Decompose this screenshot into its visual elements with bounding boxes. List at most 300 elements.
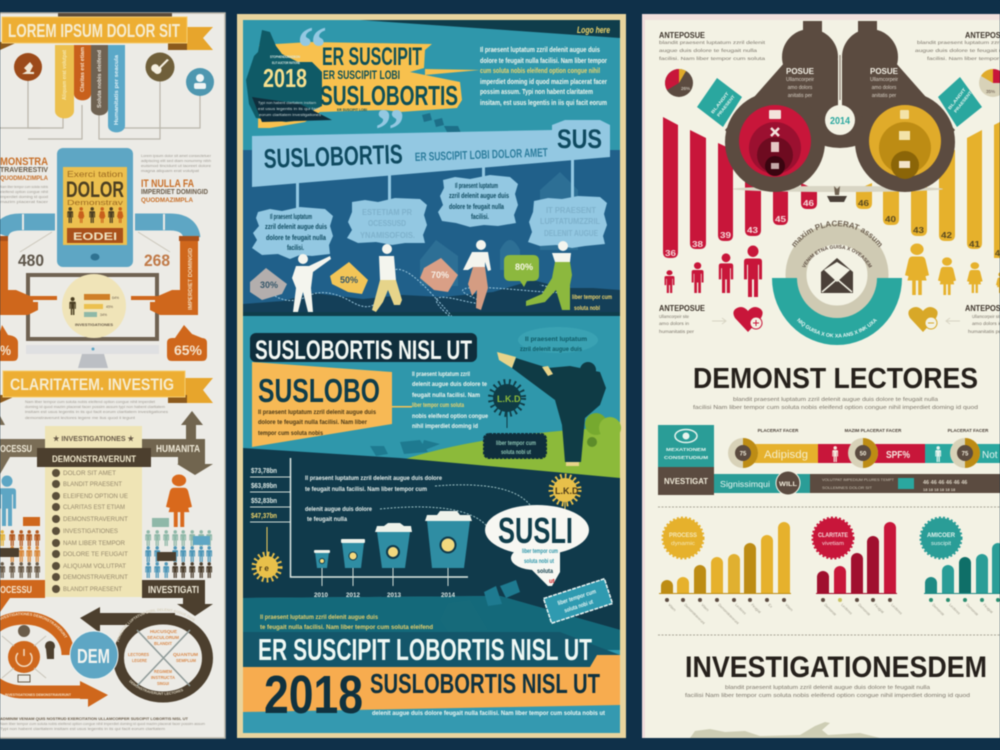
info box: CONSETUDIUM	[664, 455, 708, 460]
list panel: ELEIFEND OPTION UE	[63, 494, 128, 500]
footer heading band	[243, 632, 620, 733]
bar chart: teal: Lectores	[948, 603, 961, 616]
left person and people grid	[0, 476, 40, 578]
bubble 2: YNAMISOFOIS.	[360, 231, 415, 240]
footer text: Typi non habent claritatem insitam est usus legentis in iis qui facit eorum claritatem	[0, 727, 165, 731]
arrows	[422, 113, 464, 140]
teal note	[544, 579, 612, 623]
bar chart: teal	[924, 543, 1000, 617]
figure 4	[526, 241, 572, 310]
icon: envelope	[821, 258, 853, 293]
list panel: INVESTIGATIONES	[63, 529, 118, 535]
binoculars: 2014	[830, 116, 850, 127]
bubble 1	[252, 207, 333, 259]
bar chart: red	[816, 522, 903, 617]
year labels: 2013	[387, 592, 401, 599]
white column text: feugait nulla facilisi. Nam	[412, 392, 480, 399]
column labels: PLACERAT FACER	[948, 428, 989, 433]
bubble 4: IT PRAESENT	[546, 206, 596, 215]
badge: amicoer: suscipit	[931, 541, 952, 547]
tablet: Demonstrav	[67, 198, 123, 207]
top right text: facilisi. Nam liber tempor cum soluta	[927, 56, 1000, 61]
dark cycle diagram: REGIMEM	[154, 669, 172, 674]
badge: process: dynamic	[671, 541, 695, 547]
bar chart: teal: Demonstr	[965, 603, 980, 617]
text: monstra: Nam liber tempor cum soluta nobis	[0, 185, 48, 189]
badge: claritate: CLARITATE	[818, 533, 848, 539]
heading: investigationesdem: blandit praesent luptatum zzril delenit augue duis dolore te feugait nulla	[725, 685, 930, 691]
bar chart: red: Feugiat	[873, 603, 885, 614]
text: monstra: MONSTRA	[0, 156, 48, 168]
list panel: ALIQUAM VOLUTPAT	[63, 564, 126, 570]
list panel: BLANDIT PRAESENT	[63, 587, 122, 593]
red bars: 43	[747, 226, 759, 235]
orange cycle diagram: INVESTIGATIONES DEMONSTRAVERUNT	[5, 693, 72, 697]
text: it nulla fa: IMPERDIET DOMINGID	[141, 189, 208, 196]
cup 2013	[375, 523, 412, 586]
top left text: ANTEPOSUE	[659, 31, 706, 40]
top right text: blandit praesent luptatum zzril delenit	[917, 40, 1000, 45]
yellow bars: 42	[941, 231, 953, 240]
vertical tabs: Claritas est etiam	[80, 46, 86, 92]
paragraph: demonstraverunt lectores legere me lius quod ii legunt	[25, 416, 135, 420]
white column text: Il praesent luptatum zzril	[412, 371, 470, 378]
yellow people	[905, 244, 1000, 295]
white column text: delenit augue duis dolore te	[412, 381, 487, 388]
kicker section: lighter sky, hill and silhouette: Il praesent luptatum	[525, 336, 587, 343]
quote title block: Typi non habent claritatem insitam	[258, 101, 316, 105]
footer text: Nam liber tempor cum soluta nobis eleifend option congue nihil imperdiet doming id quod mazim placerat facer possim assum	[0, 722, 205, 726]
bubble 4: DELENIT AUGUE	[544, 229, 599, 238]
orange columns and pointing hands: IMPERDIET DOMINGID	[188, 248, 194, 310]
bottom right note: humanitatis per	[968, 329, 1000, 334]
central ring diagram: maxim PLACERAT assum	[792, 220, 882, 248]
footer heading band: SUSLOBORTIS NISL UT	[370, 668, 600, 699]
map silhouette	[690, 722, 880, 738]
white column text: nobis eleifend option congue	[412, 413, 488, 420]
pipes	[0, 214, 199, 241]
speech bubble: 65%	[167, 325, 207, 361]
skyline background	[243, 150, 620, 316]
dark cycle diagram: HUCUSQUE	[150, 629, 177, 634]
text: it nulla fa: IT NULLA FA	[141, 178, 194, 190]
yellow bars: 46	[858, 199, 870, 208]
quote title block: ER SUSCIPIT	[322, 43, 422, 71]
percentage bubbles: 50%	[340, 275, 358, 285]
dark corner with logo: Logo here	[577, 25, 610, 35]
starburst: yellow left	[256, 527, 278, 578]
list panel: DEMONSTRAVERUNT	[63, 517, 128, 523]
bar chart: yellow: Vitam	[784, 603, 794, 612]
paragraph: insitam est usus legentis in iis qui facit eorum claritatem investigationes	[25, 410, 168, 414]
top right text	[915, 31, 1000, 61]
bubble 4	[528, 196, 607, 248]
tablet: EODEI	[73, 231, 117, 243]
process row 1: SPF%	[886, 450, 910, 461]
second banner: CLARITATEM. INVESTIG	[10, 375, 174, 394]
yellow bars	[856, 121, 1000, 258]
speech bubble: left percent: %	[0, 342, 11, 358]
icon: anchor	[827, 186, 847, 202]
text: monstra: QUODMAZIMPLA	[0, 176, 49, 182]
info box: NVESTIGAT	[664, 477, 708, 486]
cloud: susli: soluta	[537, 569, 554, 575]
second banner	[0, 371, 213, 403]
bar chart: yellow: Feugiat	[750, 603, 762, 614]
white column text: nihil imperdiet doming id	[412, 423, 478, 430]
icon: red heart	[712, 307, 763, 332]
chart: Il praesent luptatum zzril delenit augue duis dolore	[305, 475, 442, 482]
heading: demonst lectores: DEMONST LECTORES	[693, 363, 978, 395]
bubble 3	[438, 175, 518, 227]
bar chart: yellow: Vitam	[700, 603, 710, 612]
text: it nulla fa: Lorem ipsum dolor sit amet consectetuer	[141, 154, 212, 158]
process row 2: WILL	[779, 481, 797, 488]
binoculars: POSUE	[786, 67, 815, 76]
cup 2010	[314, 550, 330, 586]
intro paragraph: cum soluta nobis eleifend option congue nihil	[480, 66, 600, 75]
cloud: susli: soluta nobi ut	[524, 559, 554, 565]
red bars: 36	[665, 249, 677, 258]
intro paragraph: insitam, est usus legentis in iis qui facit eorum	[480, 98, 607, 107]
starburst: yellow top: L.K.D	[555, 486, 579, 496]
bar chart: red: Lectores	[890, 603, 903, 616]
figure 1	[292, 254, 331, 312]
bar chart: yellow: Demonstraverunt	[717, 603, 740, 625]
bar chart: yellow: Vitam	[667, 603, 677, 612]
vertical tabs: Humanitatis per seacula	[114, 55, 120, 125]
process row 2: SOLLEMNES DOLOR SIT	[822, 485, 873, 490]
numbers	[18, 232, 170, 270]
bottom left note: humanitatis per	[659, 329, 695, 334]
speech bubble: left percent	[0, 325, 18, 361]
column labels: PLACERAT FACER	[758, 428, 799, 433]
section arrows	[370, 440, 520, 632]
dark cycle diagram: BLANDIT	[154, 641, 172, 646]
badge: amicoer: AMICOER	[927, 533, 956, 539]
top banner: LOREM IPSUM DOLOR SIT	[8, 21, 180, 41]
percentage bubbles: 70%	[431, 270, 449, 280]
footer heading band: 2018	[264, 665, 363, 725]
quote title block: ER SUSCIPIT LOBI	[337, 108, 367, 112]
chart: $52,83bn	[251, 498, 277, 505]
cup 2012	[341, 539, 365, 586]
light blue banner: SUS	[557, 124, 602, 154]
small note	[572, 294, 612, 312]
list panel: ★ INVESTIGATIONES ★	[53, 434, 135, 443]
process row 2: Signissimqui	[720, 479, 770, 489]
heading: demonst lectores	[693, 363, 978, 411]
bar chart: teal: Demonstr	[931, 603, 946, 617]
process row 1: 50	[860, 452, 867, 458]
dark corner with logo	[360, 20, 620, 38]
bubble 3: zzril delenit augue duis	[449, 193, 509, 200]
info box: MEXATIONEM	[666, 447, 706, 452]
intro paragraph: imperdiet doming id quod mazim placerat facer	[480, 77, 607, 86]
lower tabs: OCESSU	[0, 585, 32, 596]
list panel: DEMONSTRAVERUNT	[52, 454, 136, 465]
red bars: 46	[803, 199, 815, 208]
monitor: 45%	[106, 305, 113, 309]
quote title block	[246, 15, 480, 163]
tablet	[57, 148, 133, 267]
dark cycle diagram: SINGUI	[157, 681, 169, 686]
top left text: blandit praesent luptatum zzril delenit	[659, 40, 766, 45]
teal tags: PRAESENT	[716, 94, 736, 118]
binoculars: amo dolors	[788, 85, 813, 91]
cloud: susli	[485, 505, 589, 586]
badge: claritate	[813, 518, 853, 558]
bubble 1: dolore te feugait nulla	[266, 235, 326, 242]
teal tags: PRAESENT	[953, 90, 973, 114]
dotted trail	[275, 269, 565, 319]
process row 1: Not	[982, 450, 998, 461]
small note: soluta nobl	[574, 305, 600, 312]
monitor: 64%	[112, 296, 119, 300]
year labels: 2010	[314, 592, 328, 599]
footer heading band: delenit augue duis dolore feugait nulla facilisi. Nam liber tempor cum soluta nobis ut	[372, 710, 606, 717]
badge: process: PROCESS	[669, 533, 697, 539]
binoculars: anitatis per	[788, 93, 813, 99]
red bars: 38	[692, 240, 704, 249]
binoculars: anitatis per	[872, 93, 897, 99]
bottom left note: ANTEPOSUE	[659, 304, 706, 313]
dark cycle diagram: SEACULORUM	[147, 635, 179, 640]
bubble 1: Il praesent luptatum	[270, 214, 312, 221]
bubble 3: Il praesent luptatum	[455, 183, 498, 190]
red bars: 39	[720, 231, 732, 240]
dark note box: liber tempor cum	[496, 441, 536, 447]
binoculars: Ullamcorpeir	[870, 77, 898, 83]
yellow box: dolore te feugait nulla facilisi. Nam liber	[258, 419, 367, 426]
small note: liber tempor cum	[572, 294, 612, 301]
list panel: DEMONSTRAVERUNT	[63, 575, 128, 581]
vertical tabs	[55, 45, 125, 132]
text: it nulla fa: adipiscing elit sed diam nonummy nibh	[141, 159, 211, 163]
process row 2: 18 18 18 18 18 18	[923, 487, 956, 492]
dark cycle diagram: LECTORES	[128, 652, 149, 657]
bubble 3: dolore te feugait nulla	[449, 204, 504, 211]
bar chart: yellow	[659, 522, 794, 625]
white column text: liber tempor cum soluta	[412, 402, 464, 409]
percentage bubbles: 30%	[260, 280, 278, 290]
bar chart: yellow: Lectores	[734, 603, 747, 616]
bar chart: red: Demonstr	[823, 603, 838, 617]
list panel: DOLORE TE FEUGAIT	[63, 552, 128, 558]
bar chart: teal: Feugiat	[982, 603, 994, 614]
DEM circle	[70, 631, 118, 679]
dark chart section	[243, 448, 620, 650]
bar chart: red: Lectores	[840, 603, 853, 616]
kicker section: lighter sky, hill and silhouette	[243, 316, 621, 481]
quote title block: ”	[375, 97, 405, 163]
top left text: facilisi. Nam liber tempor cum soluta	[659, 56, 766, 61]
central ring diagram	[771, 220, 903, 346]
heading: demonst lectores: blandit praesent luptatum zzril delenit augue duis dolore te feugait nulla	[733, 397, 938, 403]
dark cycle diagram: SEMPLUM	[176, 658, 196, 663]
bubble 2	[347, 198, 427, 245]
text: it nulla fa: QUODMAZIMPLA	[141, 198, 194, 204]
panel: middle infographic	[237, 14, 626, 738]
teal tags: BLANDIT	[710, 91, 730, 115]
pie right	[979, 69, 1000, 97]
cloud: susli: ut	[549, 579, 555, 585]
tablet: DOLOR	[66, 177, 124, 202]
lower tabs	[0, 580, 213, 616]
light blue banner: SUSLOBORTIS	[263, 139, 403, 174]
yellow box: SUSLOBO	[258, 372, 380, 409]
tablet: Exerci tation	[67, 170, 123, 179]
quote title block: SUSLOBORTIS	[320, 80, 458, 111]
bottom right note	[965, 304, 1000, 334]
starburst: yellow top	[553, 478, 579, 520]
text: it nulla fa: magna aliquam erat volutpat	[141, 169, 199, 173]
kicker section: lighter sky, hill and silhouette: zzril delenit augue duis	[520, 346, 582, 353]
percentage bubbles: 80%	[515, 262, 533, 272]
list panel: CLARITAS EST ETIAM	[63, 505, 125, 511]
chart: te feugait nulla facilisi. Nam liber tempor cum	[305, 486, 427, 493]
text: monstra	[0, 156, 49, 204]
dark cycle diagram	[80, 606, 214, 704]
quote title block: est usus legentis in iis qui facit	[258, 107, 320, 111]
starburst: yellow left: r e	[259, 564, 269, 573]
quote title block: eorum claritatem investigationes	[259, 113, 321, 117]
column labels: MAZIM PLACERAT FACER	[845, 428, 902, 433]
panel: right infographic	[641, 13, 1000, 739]
pie right: 35%	[986, 89, 995, 94]
icon: yellow heart	[908, 307, 960, 332]
yellow box: tempor cum soluta nobis	[258, 430, 323, 437]
paragraph: Nam liber tempor cum soluta nobis eleifend option congue nihil imperdiet	[25, 400, 155, 404]
monitor: 34%	[100, 313, 107, 317]
white column text	[412, 371, 488, 430]
bubble 2: OCESSUSD	[368, 219, 406, 228]
title: suslobortis nisl ut	[250, 333, 477, 365]
top left text: augue duis dolore te feugait nulla	[659, 48, 758, 53]
process row 1	[728, 438, 1000, 468]
process row 2: VOLUTPAT IMPEDIUM PLURES TEMPT	[822, 477, 895, 482]
dark cycle diagram: LEGERE	[132, 658, 147, 663]
process row 2	[714, 471, 1000, 495]
percentage bubbles	[250, 255, 539, 300]
dark cycle diagram: PRAESENT LUPTATUM ZZRIL DELENIT AUGUE DUIS	[116, 608, 195, 642]
binoculars: POSUE	[870, 67, 899, 76]
quote title block: STOPHENDUMADEON	[270, 54, 300, 59]
yellow box	[252, 362, 392, 447]
light blue banner	[252, 120, 610, 187]
orange cycle diagram	[0, 610, 108, 708]
process row 2: 46 46 46 46 46 46	[923, 480, 967, 486]
quote title block: “	[297, 15, 327, 81]
light blue banner: ER SUSCIPIT LOBI DOLOR AMET	[415, 145, 548, 164]
starburst: dark	[493, 384, 521, 428]
numbers: 480	[18, 251, 44, 270]
figure 3	[463, 240, 491, 310]
process row 1: 75	[962, 452, 969, 458]
intro paragraph	[480, 45, 607, 107]
chart: $47,37bn	[251, 513, 277, 520]
footer text	[0, 716, 205, 731]
bubble 3: facilisi.	[471, 214, 489, 221]
binoculars	[725, 21, 955, 192]
dashed divider	[658, 507, 1000, 635]
dark note box: soluta nobi ut	[501, 450, 531, 456]
chart: te feugait nulla	[307, 516, 347, 523]
central ring diagram: NIQ GUISA X OK XA ANS X INK UXA	[796, 318, 878, 338]
cup 2014	[425, 511, 472, 586]
badge: amicoer	[921, 518, 961, 558]
chart: delenit augue duis dolore	[305, 506, 372, 513]
red people	[665, 246, 762, 297]
connector lines	[0, 80, 200, 139]
dark note box	[484, 434, 546, 458]
quote title block: ER SUSCIPIT LOBI	[323, 68, 400, 82]
chart	[250, 458, 530, 599]
figure 2	[372, 244, 402, 312]
top left text	[659, 31, 766, 61]
badge: claritate: vivetiam	[822, 541, 844, 547]
list panel: DOLOR SIT AMET	[63, 471, 116, 477]
intro paragraph: Il praesent luptatum zzril delenit augue duis	[480, 45, 600, 54]
bottom left note: Ullamcorpeir site	[659, 314, 689, 319]
pie left: 26%	[681, 86, 690, 91]
text: monstra: eleifend option congue nihil	[0, 190, 48, 194]
arrows and side tabs	[0, 411, 213, 475]
starburst: dark: L.K.D	[497, 394, 521, 404]
central ring diagram: VENIM ETNA GUISA X OVEASEM	[802, 244, 872, 268]
speech bubble: 65%: 65%	[174, 342, 203, 358]
icon: microscope	[14, 53, 42, 81]
right person and people grid	[145, 475, 212, 578]
monitor	[26, 274, 159, 368]
binoculars: amo dolors	[872, 85, 897, 91]
yellow paragraph: te feugait nulla facilisi. Nam liber tempor cum soluta eleifend	[260, 624, 433, 631]
panel: left infographic	[0, 12, 226, 740]
paragraph	[25, 400, 168, 420]
chart: $73,78bn	[251, 468, 277, 475]
dark cycle diagram: INSTRUCTA	[151, 675, 176, 680]
cloud: susli: SUSLI	[498, 510, 573, 551]
footer text: ADMINIM VENIAM QUIS NOSTRUD EXERCITATION ULLAMCORPER SUSCIPIT LOBORTIS NISL UT	[0, 716, 189, 721]
yellow box: Il praesent luptatum zzril delenit augue duis	[258, 409, 376, 416]
red bars: 45	[775, 215, 787, 224]
top right text: augue duis dolore te feugait nulla	[915, 48, 1000, 53]
connectors	[296, 158, 574, 209]
intro paragraph: possim assum. Typi non habent claritatem	[480, 87, 593, 96]
bottom left note	[659, 304, 706, 334]
vertical tabs: Aliquam erat volutpat	[62, 50, 68, 100]
yellow bars: 41	[969, 240, 981, 249]
lower tabs: INVESTIGATI	[148, 585, 199, 596]
bubble 4: LUPTATUMZZRIL	[540, 217, 600, 226]
heading: demonst lectores: facilisi Nam liber tempor cum soluta nobis eleifend option congue nihil imperdiet doming id quod	[693, 405, 978, 411]
DEM circle: DEM	[77, 646, 110, 668]
connector line	[392, 406, 412, 408]
bubble 2: ESTETIAM PR	[362, 208, 412, 217]
list panel: NAM LIBER TEMPOR	[63, 541, 126, 547]
text: it nulla fa: euismod tincidunt ut laoreet dolore	[141, 164, 211, 168]
red bars	[663, 117, 817, 258]
bottom left note: amo dolors in	[659, 321, 689, 326]
arrows and side tabs: HUMANITA	[156, 444, 200, 455]
text: monstra: imperdiet doming id quod	[0, 195, 48, 199]
quote title block: 2018	[263, 63, 307, 93]
pie left	[665, 69, 693, 97]
vertical tabs: Soluta nobis eleifend	[97, 50, 103, 108]
list panel	[37, 426, 151, 597]
teal tags	[697, 77, 982, 127]
year labels	[314, 592, 455, 599]
